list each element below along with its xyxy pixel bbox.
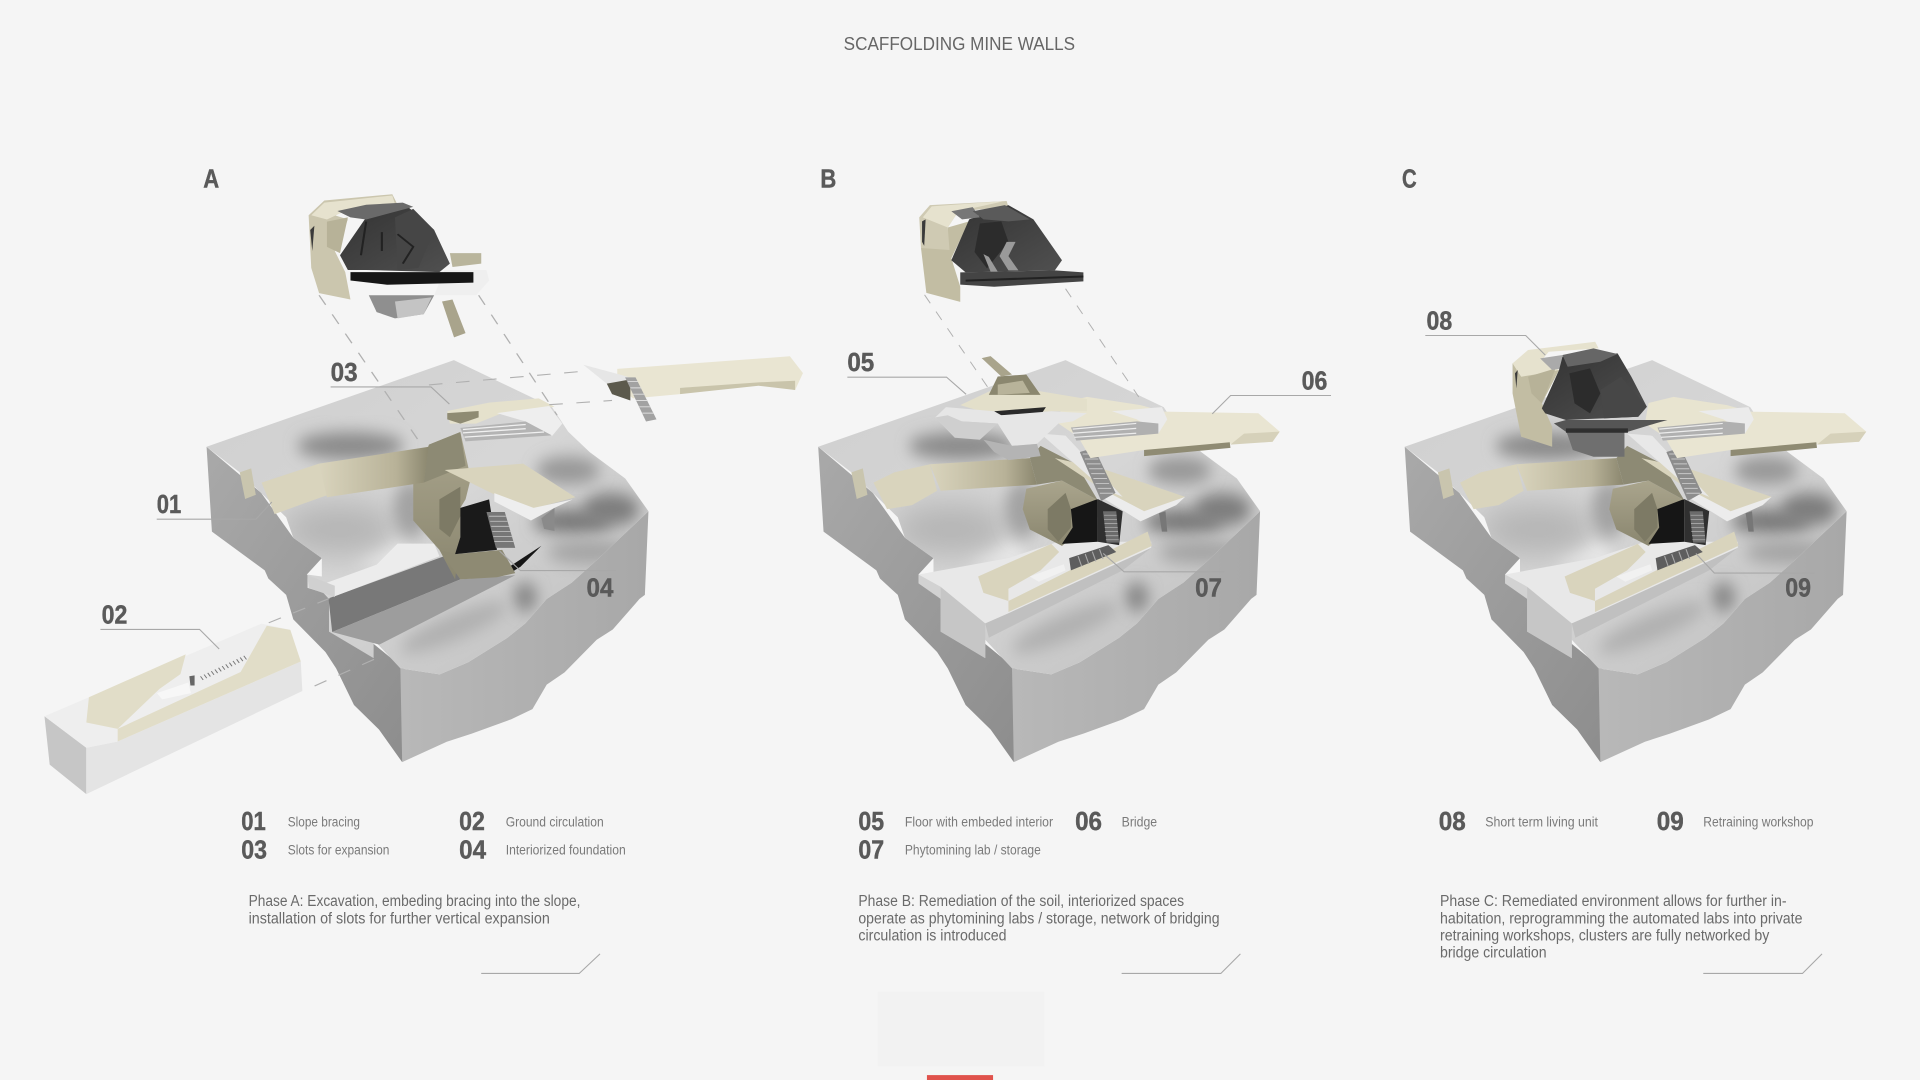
legend item 03: Slots for expansion [288, 843, 389, 858]
legend item 05: 05 [858, 808, 884, 836]
embedded floor [935, 356, 1087, 460]
callout 06 [1212, 367, 1331, 414]
corner mark C [1703, 954, 1822, 973]
legend A [241, 808, 626, 864]
title: SCAFFOLDING MINE WALLS [844, 33, 1075, 54]
legend item 05: Floor with embeded interior [905, 815, 1054, 830]
legend item 08: 08 [1439, 808, 1466, 836]
detached pod [919, 201, 1083, 302]
phase letter A: A [203, 165, 219, 193]
text: phase C description [1440, 893, 1802, 962]
terrain block C [1405, 360, 1847, 762]
legend item 06 [1075, 808, 1157, 836]
callout 02 [100, 601, 219, 649]
open trench [308, 544, 541, 645]
legend item 05 [858, 808, 1054, 836]
legend item 01 [241, 808, 360, 836]
callout 09 [1696, 553, 1815, 602]
assembly dashed lines [262, 295, 612, 691]
text: phase B description: Phase B: Remediation of the soil, interiorized spaces [858, 893, 1184, 910]
legend item 01: 01 [241, 808, 266, 836]
legend item 08: Short term living unit [1485, 815, 1598, 830]
callout 03: 03 [331, 359, 358, 387]
detached ground circulation piece [44, 624, 302, 794]
legend item 02: Ground circulation [506, 815, 604, 830]
corner mark B [1122, 954, 1240, 973]
callout 02: 02 [102, 601, 127, 629]
structure B [874, 201, 1280, 658]
central column [413, 432, 515, 579]
legend item 09: 09 [1657, 808, 1684, 836]
core structure and bridge [874, 397, 1280, 658]
panel: phase B diagram [818, 165, 1331, 762]
slot for expansion [447, 398, 562, 441]
legend item 06: Bridge [1122, 815, 1157, 830]
callout 08 [1425, 307, 1545, 355]
red footer tab [927, 1075, 993, 1080]
callout 09: 09 [1785, 574, 1811, 602]
callout 03 [331, 359, 449, 404]
text: phase B description [858, 893, 1220, 944]
legend B [858, 808, 1157, 864]
legend item 07 [858, 836, 1041, 864]
legend item 04 [459, 836, 626, 864]
text: phase C description: bridge circulation [1440, 945, 1547, 962]
terrain block A [207, 360, 648, 762]
detached bridge [583, 356, 803, 422]
text: phase C description: habitation, reprogramming the automated labs into private [1440, 910, 1802, 927]
legend item 02 [459, 808, 604, 836]
legend item 09 [1657, 808, 1813, 836]
panel: phase C diagram [1402, 165, 1866, 762]
text: phase A description: Phase A: Excavation, embeding bracing into the slope, [249, 893, 580, 910]
callout 04 [500, 551, 616, 602]
legend item 01: Slope bracing [288, 815, 360, 830]
text: phase B description: operate as phytomining labs / storage, network of bridging [858, 910, 1220, 927]
text: phase C description: retraining workshops, clusters are fully networked by [1440, 927, 1770, 944]
text: phase C description: Phase C: Remediated environment allows for further in- [1440, 893, 1787, 910]
core structure C [1460, 397, 1866, 658]
legend item 08 [1439, 808, 1598, 836]
terrain block B [818, 360, 1260, 762]
legend item 04: 04 [459, 836, 487, 864]
callout 01 [157, 491, 272, 519]
living unit C [1513, 342, 1668, 457]
assembly dashed lines [925, 289, 1139, 397]
callout 01: 01 [157, 491, 181, 519]
exploded structure A [44, 194, 803, 794]
callout 08: 08 [1427, 307, 1452, 335]
faint placeholder box [878, 992, 1044, 1067]
legend item 03 [241, 836, 389, 864]
callout 05: 05 [847, 349, 874, 377]
text: phase A description: installation of slots for further vertical expansion [249, 910, 550, 927]
legend C [1439, 808, 1813, 836]
anchor arms [262, 432, 575, 531]
callout 05 [847, 349, 966, 394]
text: phase B description: circulation is introduced [858, 927, 1007, 944]
legend item 07: Phytomining lab / storage [905, 843, 1041, 858]
legend item 04: Interiorized foundation [506, 843, 626, 858]
legend item 07: 07 [858, 836, 884, 864]
legend item 06: 06 [1075, 808, 1102, 836]
callout 07: 07 [1195, 574, 1222, 602]
legend item 02: 02 [459, 808, 485, 836]
callout 04: 04 [587, 574, 614, 602]
corner mark A [481, 954, 600, 973]
phase letter C: C [1402, 165, 1417, 193]
text: phase A description [249, 893, 580, 927]
callout 07 [1103, 553, 1224, 602]
legend item 03: 03 [241, 836, 267, 864]
callout 06: 06 [1302, 367, 1327, 395]
panel: phase A diagram [44, 165, 803, 794]
phase letter B: B [820, 165, 836, 193]
legend item 09: Retraining workshop [1703, 815, 1813, 830]
detached living unit [309, 194, 489, 337]
